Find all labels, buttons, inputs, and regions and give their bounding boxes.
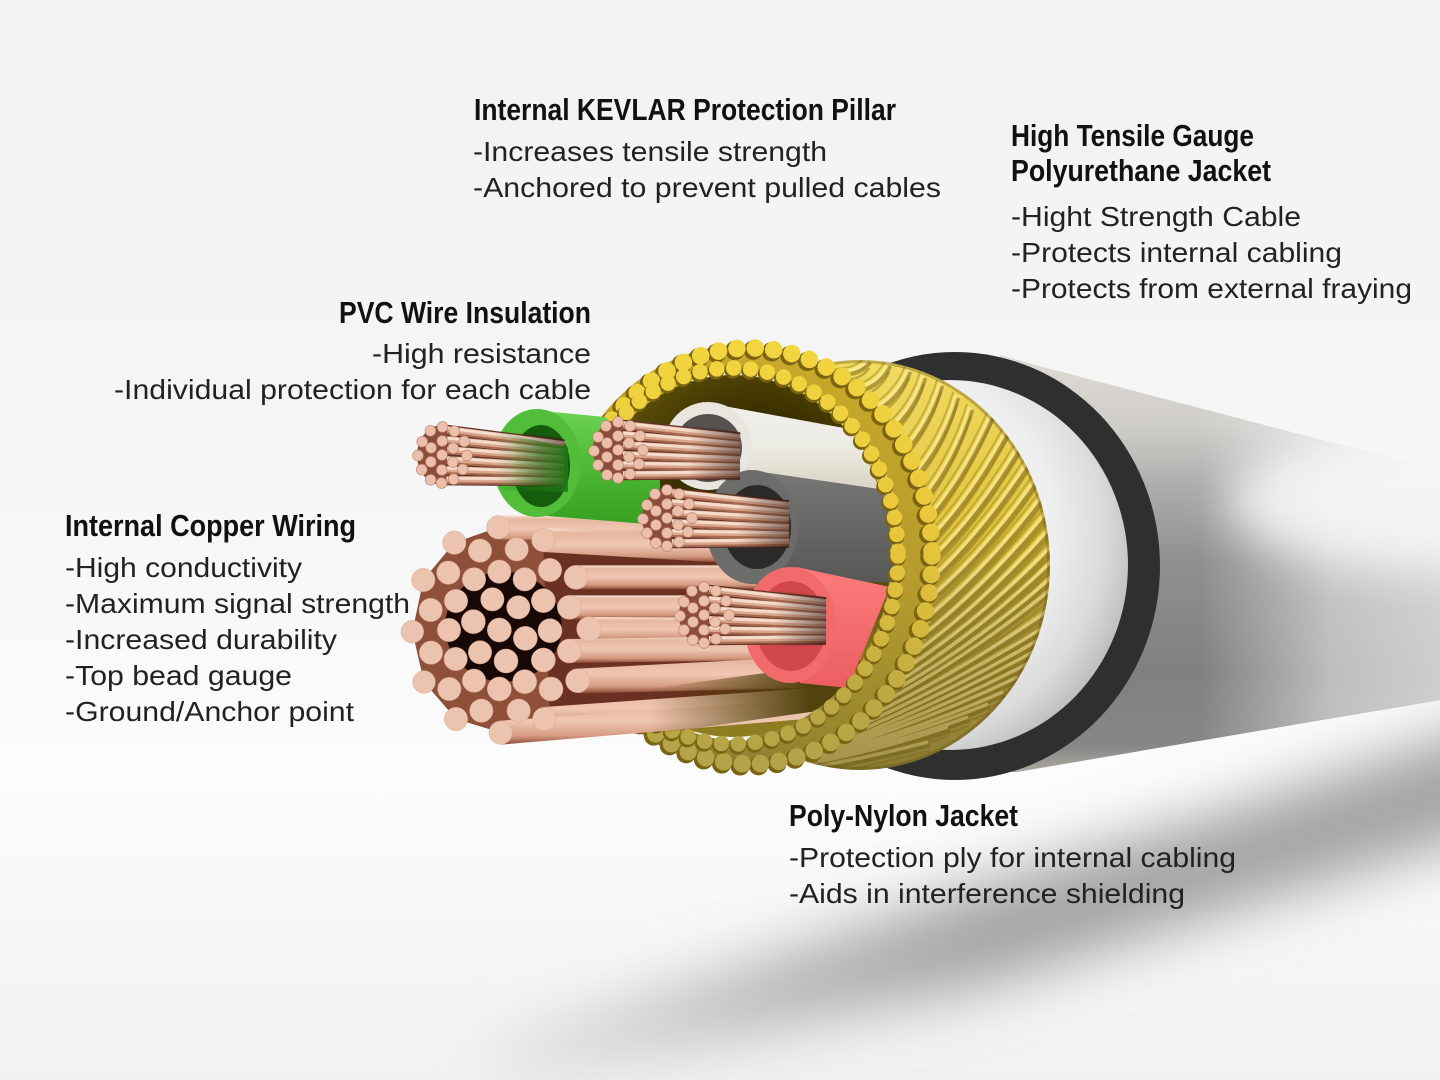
green tint on strands bbox=[495, 432, 568, 492]
callout: poly-nylon jacket bbox=[789, 798, 1236, 909]
grey PVC tube bbox=[706, 470, 896, 584]
callout: copper wiring bbox=[65, 508, 410, 727]
callout: polyurethane jacket: -Hight Strength Cable bbox=[1011, 201, 1301, 232]
callout: polyurethane jacket: Polyurethane Jacket bbox=[1011, 153, 1271, 188]
copper strands: grey tube bbox=[638, 485, 789, 551]
callout: polyurethane jacket: -Protects from external fraying bbox=[1011, 273, 1412, 304]
callout: polyurethane jacket: High Tensile Gauge bbox=[1011, 118, 1254, 153]
callout: PVC insulation: -Individual protection for each cable bbox=[114, 374, 591, 405]
callout: PVC insulation: PVC Wire Insulation bbox=[339, 295, 591, 330]
callout: copper wiring: -Increased durability bbox=[65, 624, 337, 655]
inner bead ring, right arc in front of the tubes bbox=[775, 380, 906, 746]
callout: Kevlar pillar: Internal KEVLAR Protection Pillar bbox=[474, 92, 896, 127]
large copper ground bundle bbox=[401, 515, 860, 745]
cable cavity bbox=[575, 375, 891, 737]
green PVC tube bbox=[493, 409, 660, 525]
callout: copper wiring: -High conductivity bbox=[65, 552, 302, 583]
callout: PVC insulation bbox=[114, 295, 591, 405]
callout: copper wiring: Internal Copper Wiring bbox=[65, 508, 356, 543]
copper strands: white tube bbox=[589, 417, 740, 483]
black jacket ring bbox=[750, 352, 1160, 780]
white poly-nylon jacket bbox=[772, 380, 1128, 750]
callout: copper wiring: -Top bead gauge bbox=[65, 660, 292, 691]
outer polyurethane jacket body bbox=[1000, 355, 1440, 772]
callout: poly-nylon jacket: -Protection ply for internal cabling bbox=[789, 842, 1236, 873]
floor shadow bbox=[500, 700, 1440, 1075]
callout: Kevlar pillar bbox=[473, 92, 941, 203]
callout: Kevlar pillar: -Increases tensile strength bbox=[473, 136, 827, 167]
outer bead ring bbox=[566, 348, 932, 766]
copper strands: green tube bbox=[412, 421, 565, 491]
bead backing band bbox=[568, 358, 916, 754]
callout: PVC insulation: -High resistance bbox=[372, 338, 591, 369]
callout: poly-nylon jacket: Poly-Nylon Jacket bbox=[789, 798, 1018, 833]
inner bead ring bbox=[567, 368, 898, 746]
callout: copper wiring: -Maximum signal strength bbox=[65, 588, 410, 619]
twisted yellow shield strands bbox=[757, 360, 1050, 770]
white PVC tube bbox=[664, 402, 880, 490]
callout: copper wiring: -Ground/Anchor point bbox=[65, 696, 354, 727]
callout: polyurethane jacket: -Protects internal cabling bbox=[1011, 237, 1342, 268]
copper strands: red tube bbox=[675, 582, 826, 648]
callout: poly-nylon jacket: -Aids in interference shielding bbox=[789, 878, 1185, 909]
callout: Kevlar pillar: -Anchored to prevent pulled cables bbox=[473, 172, 941, 203]
red PVC tube bbox=[744, 567, 890, 688]
callout: polyurethane jacket bbox=[1011, 118, 1412, 304]
cable illustration bbox=[401, 348, 1440, 800]
